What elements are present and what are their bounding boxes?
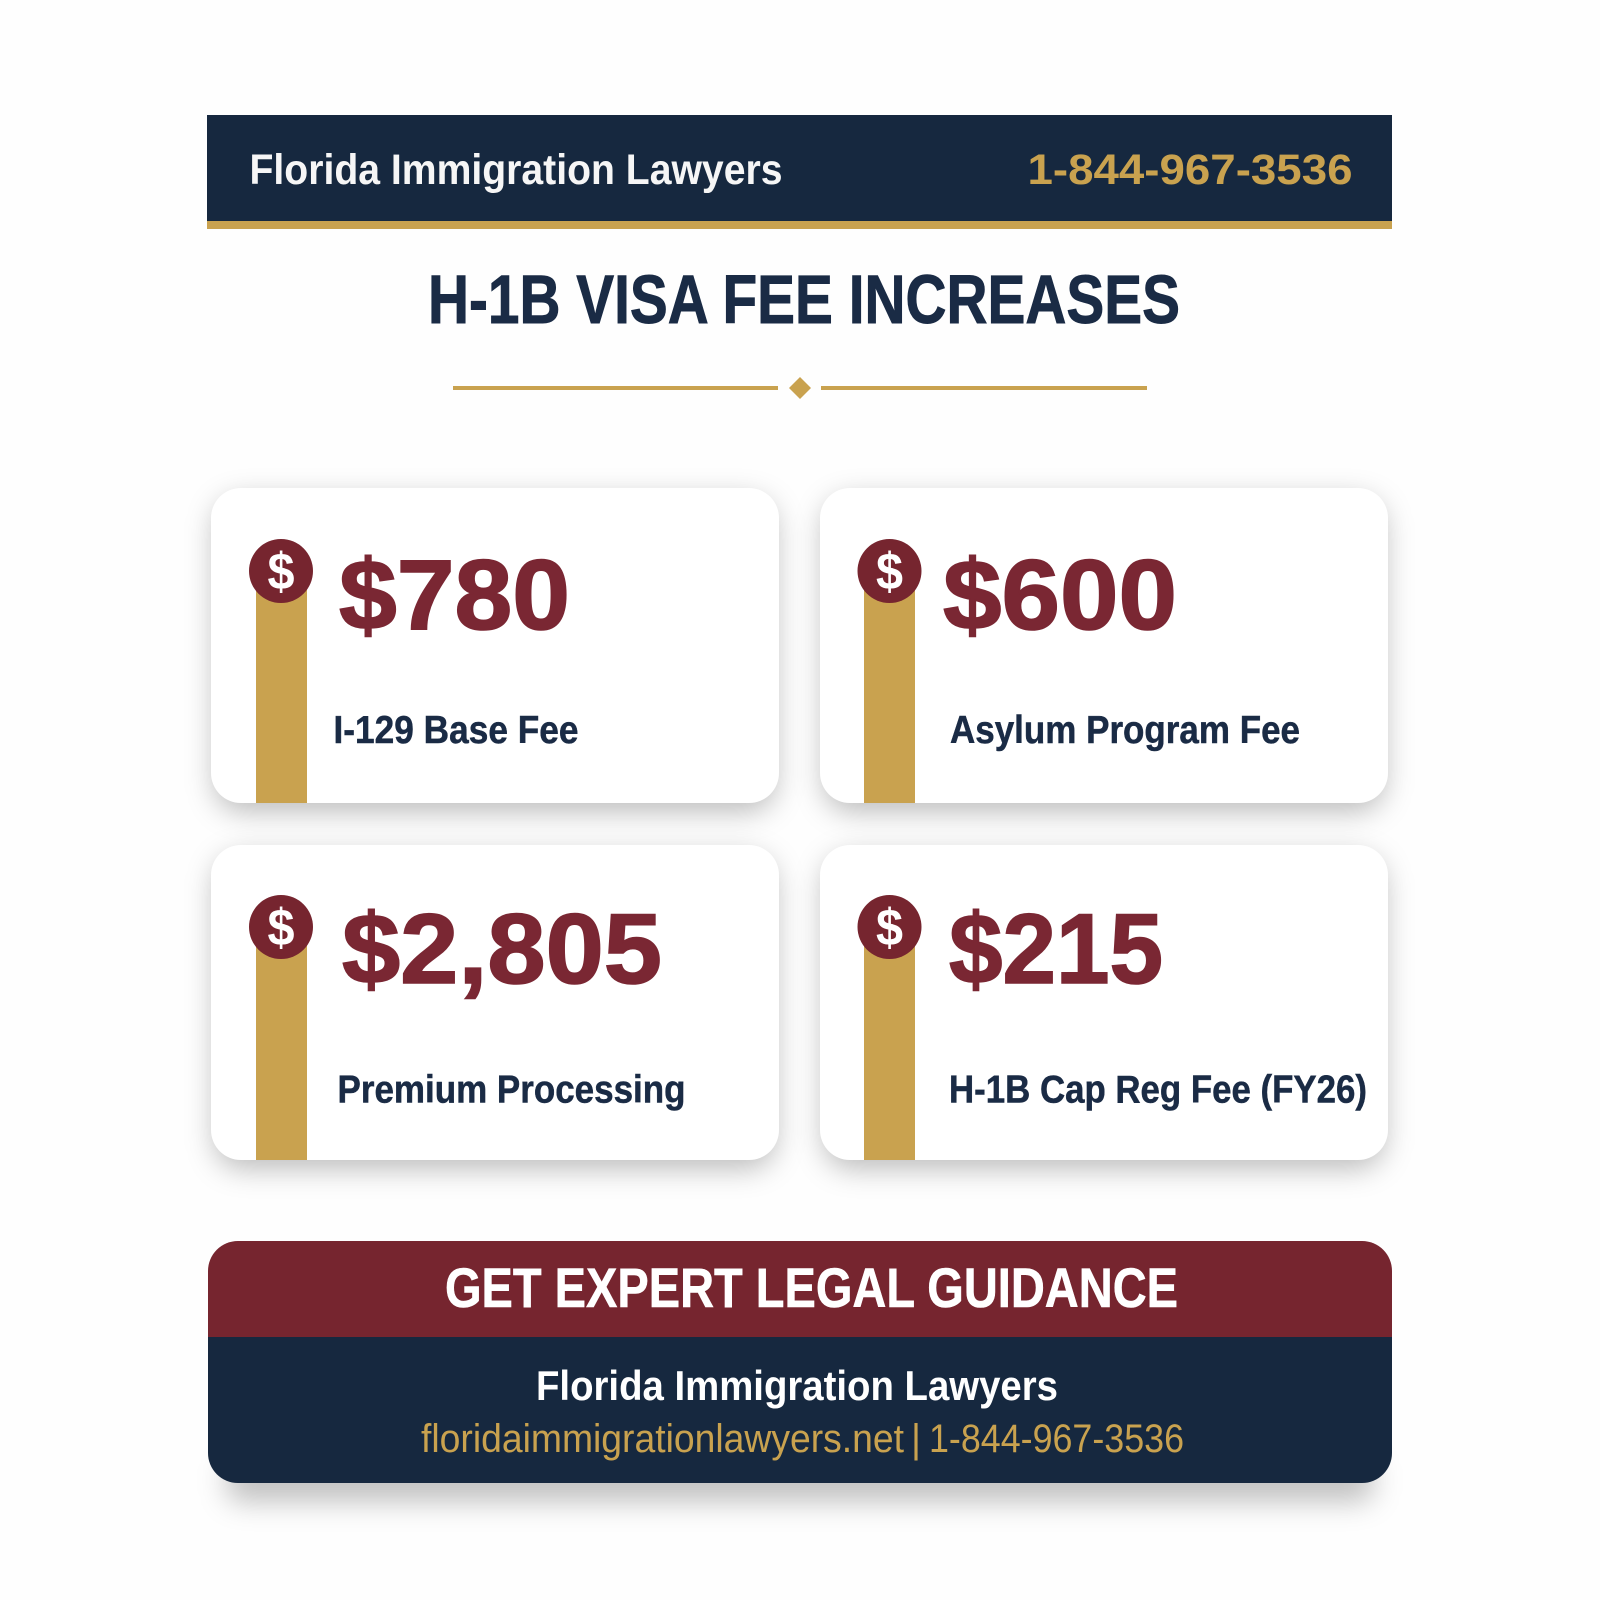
icon: dollar badge: $ (876, 899, 903, 957)
card: H-1B cap registration fee (820, 845, 1388, 1169)
icon: dollar badge (249, 895, 313, 959)
fee label: I-129 Base Fee (334, 709, 578, 752)
title: H-1B VISA FEE INCREASES (428, 261, 1180, 338)
icon: dollar badge: $ (876, 543, 903, 601)
header phone number: 1-844-967-3536 (1028, 146, 1352, 194)
fee label: Asylum Program Fee (950, 709, 1300, 752)
call to action heading: GET EXPERT LEGAL GUIDANCE (445, 1256, 1178, 1319)
call to action panel (208, 1241, 1392, 1502)
card: premium processing (211, 845, 779, 1169)
icon: dollar badge (249, 539, 313, 603)
fee amount: $600 (943, 539, 1177, 650)
firm name: Florida Immigration Lawyers (536, 1362, 1058, 1409)
icon: dollar badge (858, 895, 922, 959)
icon: dollar badge (858, 539, 922, 603)
title divider with diamond (453, 377, 1147, 399)
website and phone (421, 1417, 1184, 1461)
fee amount: $780 (339, 539, 570, 650)
fee amount: $215 (949, 893, 1163, 1004)
header firm name: Florida Immigration Lawyers (250, 146, 782, 194)
fee label: H-1B Cap Reg Fee (FY26) (949, 1068, 1367, 1112)
fee amount: $2,805 (342, 893, 662, 1004)
website and phone: floridaimmigrationlawyers.net (421, 1417, 904, 1461)
website and phone: | (911, 1417, 921, 1461)
website and phone: 1-844-967-3536 (929, 1417, 1184, 1461)
icon: dollar badge: $ (268, 543, 295, 601)
icon: dollar badge: $ (268, 899, 295, 957)
header bar (207, 115, 1392, 229)
card: asylum program fee (820, 488, 1388, 812)
card: I-129 base fee (211, 488, 779, 812)
fee label: Premium Processing (338, 1068, 686, 1112)
